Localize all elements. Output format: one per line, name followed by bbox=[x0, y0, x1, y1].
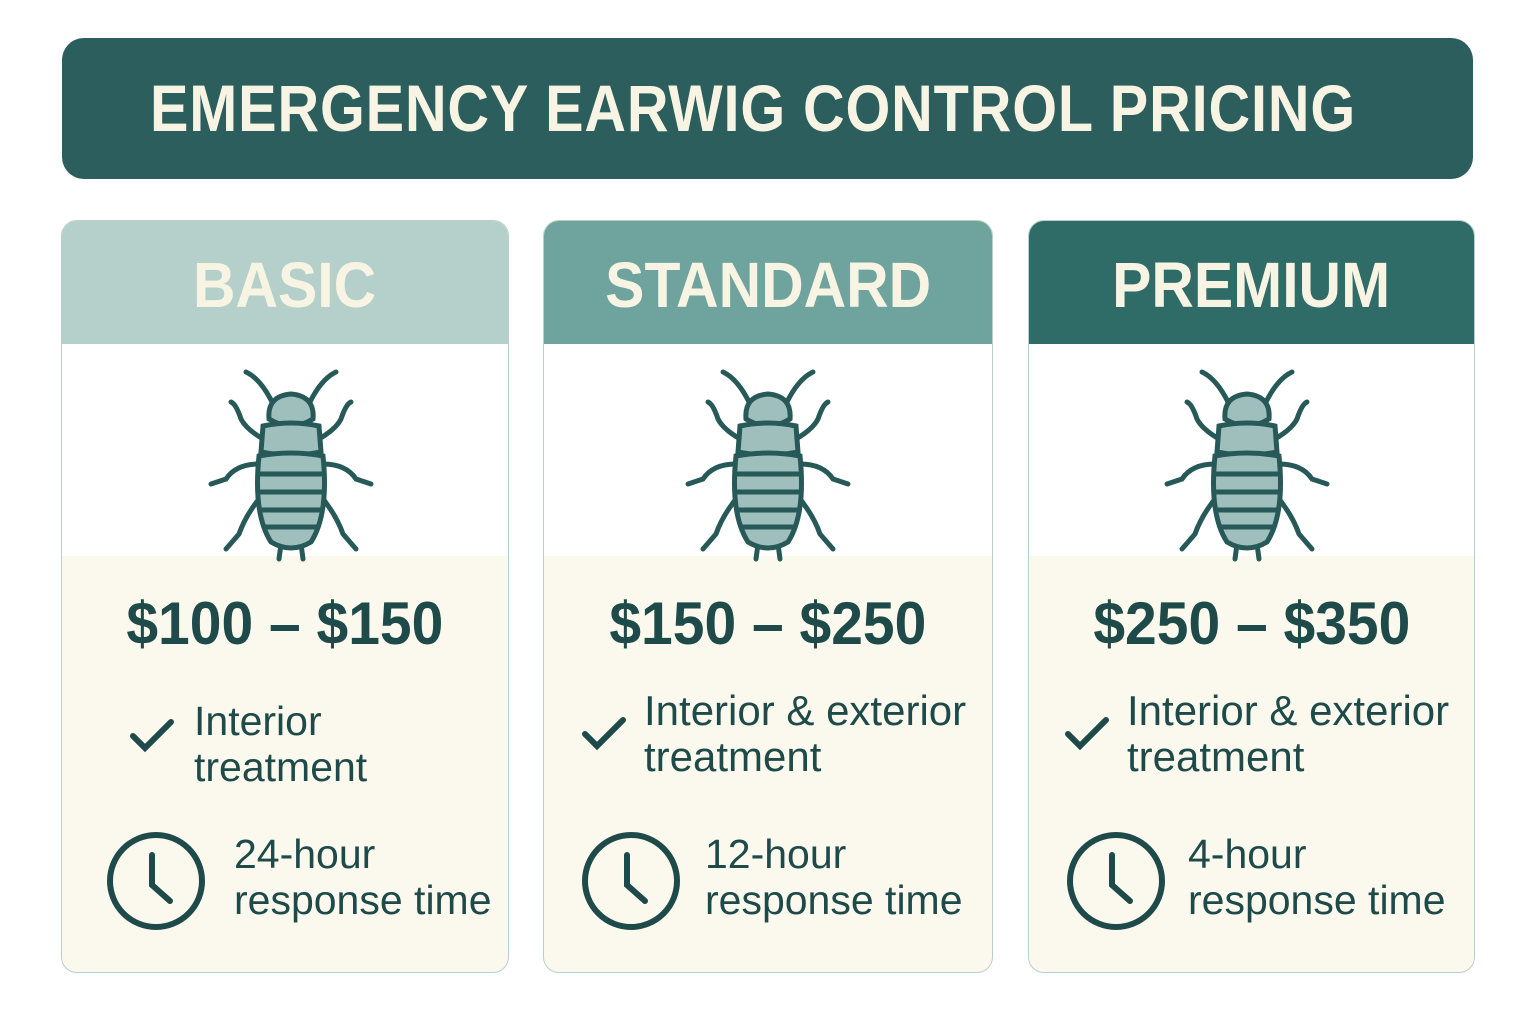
header: premium: PREMIUM bbox=[1112, 249, 1391, 321]
price: basic: $100 – $150 bbox=[126, 590, 443, 657]
feature: response time bbox=[1067, 831, 1446, 930]
icon: check bbox=[582, 717, 626, 750]
panel: standard bbox=[543, 220, 993, 973]
icon: earwig bbox=[686, 370, 850, 562]
feature: response time: response time bbox=[234, 877, 492, 923]
feature: response time: 12-hour bbox=[705, 831, 846, 877]
header: standard: STANDARD bbox=[605, 249, 931, 321]
feature: interior & exterior bbox=[1065, 687, 1449, 780]
feature: interior treatment: Interior bbox=[194, 698, 322, 744]
icon: clock bbox=[582, 832, 680, 930]
icon: earwig bbox=[208, 370, 374, 562]
feature: interior & exterior: treatment bbox=[644, 733, 821, 780]
feature: response time: response time bbox=[705, 877, 963, 923]
panel: premium bbox=[1028, 220, 1475, 973]
icon: earwig bbox=[1164, 370, 1330, 562]
feature: response time: 4-hour bbox=[1188, 831, 1307, 877]
title bbox=[62, 38, 1473, 179]
price: premium: $250 – $350 bbox=[1093, 590, 1410, 657]
feature: response time bbox=[582, 831, 963, 930]
panel: basic bbox=[61, 220, 509, 973]
icon: clock bbox=[107, 832, 205, 930]
feature: response time: 24-hour bbox=[234, 831, 375, 877]
header: premium bbox=[1029, 221, 1474, 344]
feature: interior treatment: treatment bbox=[194, 744, 367, 790]
header: basic: BASIC bbox=[193, 249, 377, 321]
title: EMERGENCY EARWIG CONTROL PRICING bbox=[150, 71, 1356, 145]
feature: interior treatment bbox=[130, 698, 367, 790]
feature: interior & exterior bbox=[582, 687, 966, 780]
icon: check bbox=[130, 719, 174, 752]
feature: interior & exterior: Interior & exterior bbox=[644, 687, 966, 734]
feature: response time: response time bbox=[1188, 877, 1446, 923]
icon: clock bbox=[1067, 832, 1165, 930]
header: standard bbox=[544, 221, 992, 344]
feature: response time bbox=[107, 831, 492, 930]
price: standard: $150 – $250 bbox=[609, 590, 926, 657]
feature: interior & exterior: Interior & exterior bbox=[1127, 687, 1449, 734]
feature: interior & exterior: treatment bbox=[1127, 733, 1304, 780]
icon: check bbox=[1065, 717, 1109, 750]
header: basic bbox=[62, 221, 508, 344]
